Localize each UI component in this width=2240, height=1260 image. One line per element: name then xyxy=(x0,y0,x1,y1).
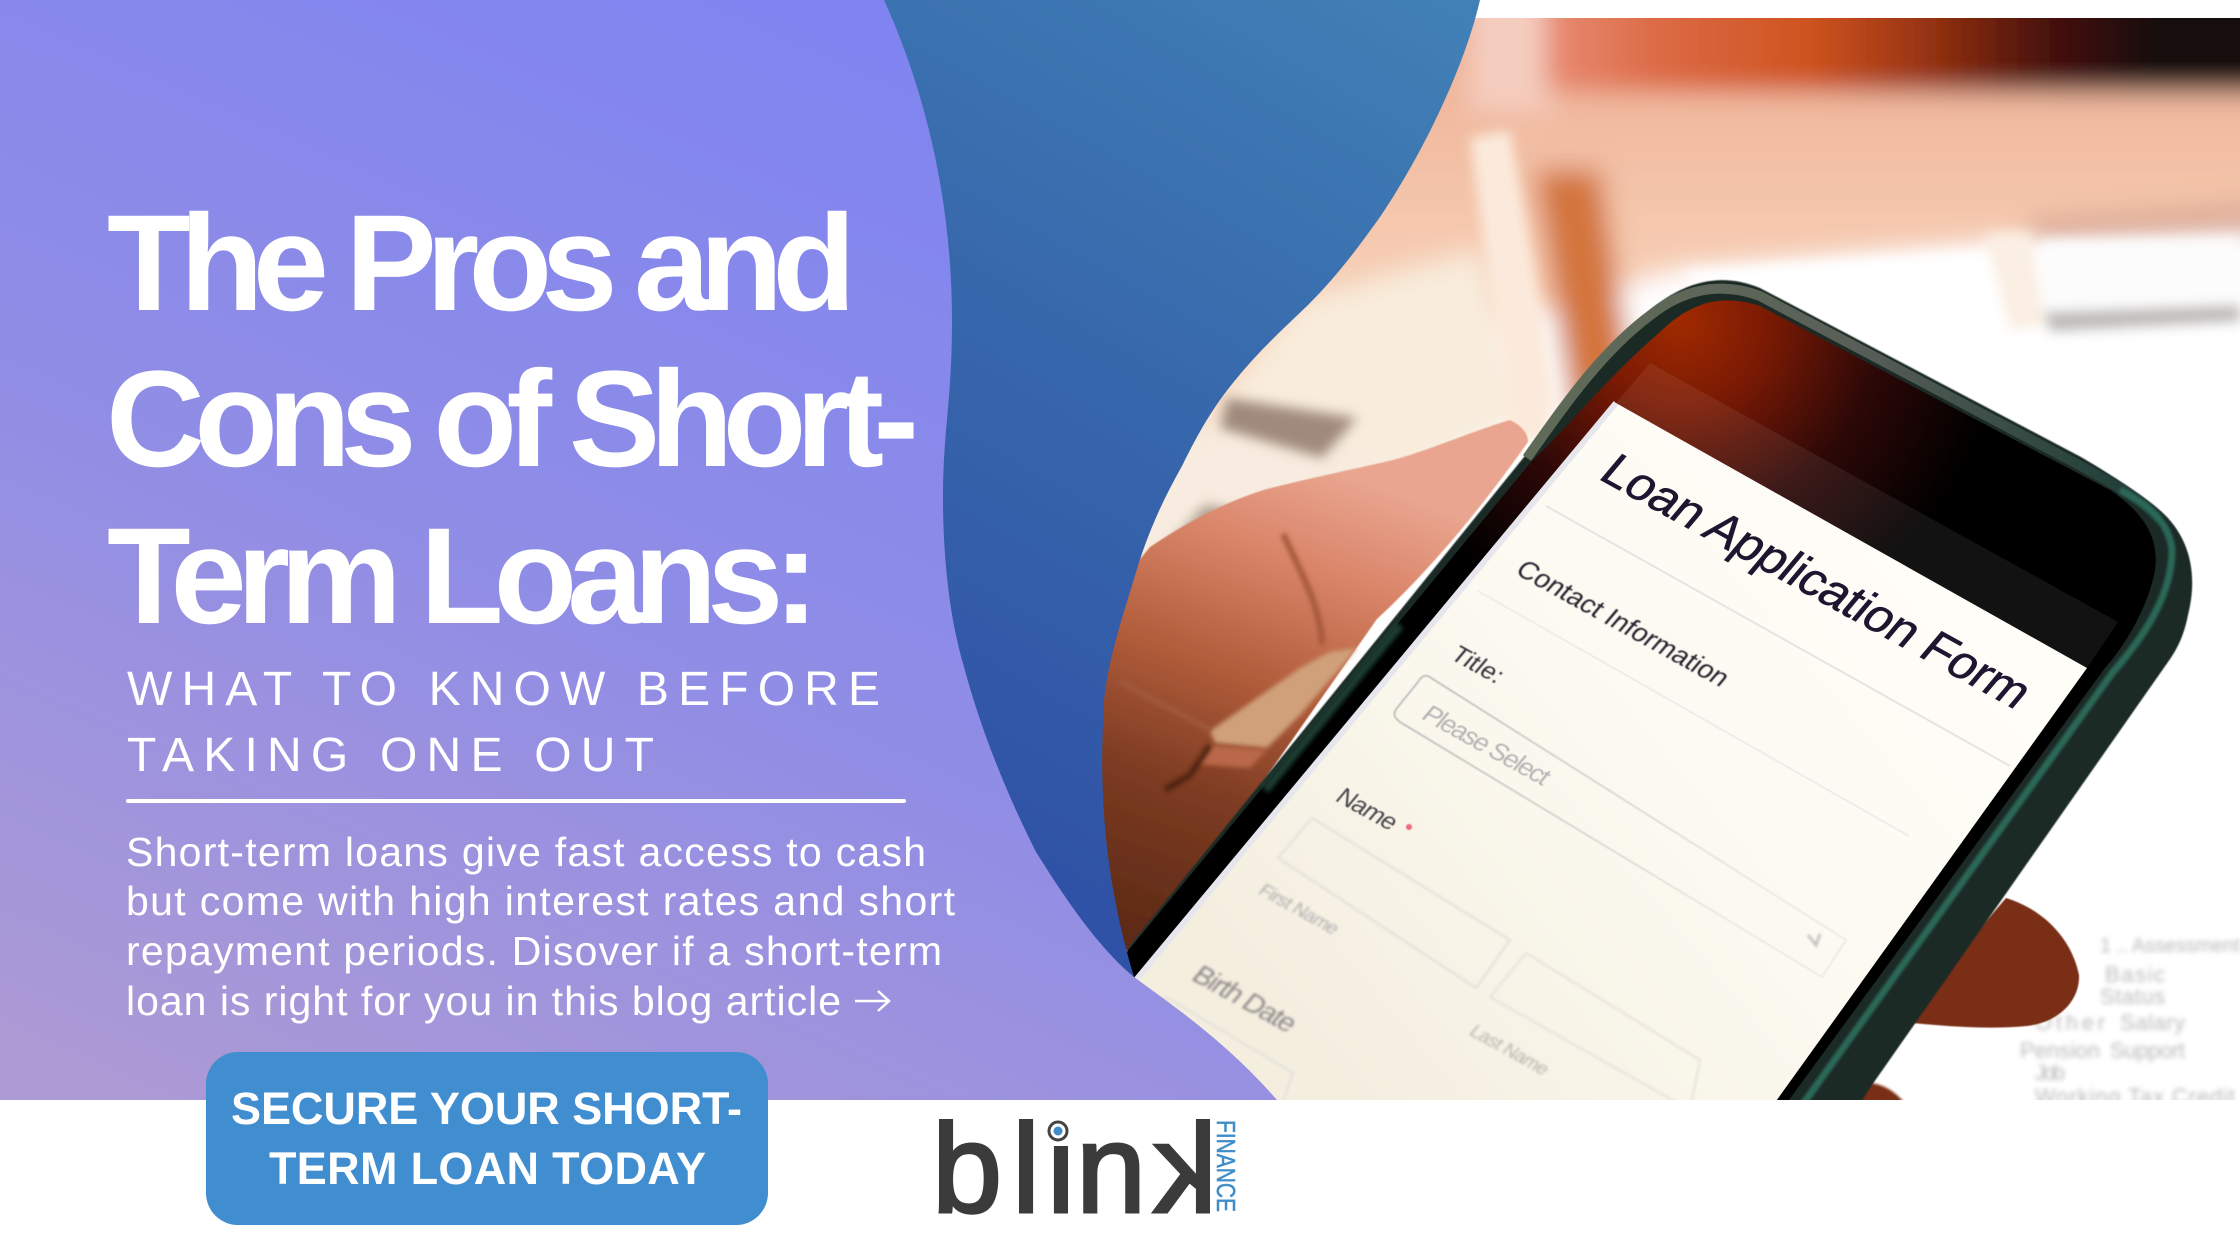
photo: hand holding phone with loan application form xyxy=(1102,18,2240,1100)
blurred paper document lines: Working Tax Credit xyxy=(2035,1084,2235,1109)
name label: Name xyxy=(1330,783,1404,836)
title xyxy=(106,187,919,653)
screen divider lines xyxy=(1478,506,2010,836)
hand: lower finger top xyxy=(1196,745,1267,768)
logo wordmark letters: b xyxy=(932,1098,1002,1239)
icon: arrow xyxy=(855,991,889,1011)
logo wordmark letters: n xyxy=(1076,1098,1146,1239)
phone black bezel xyxy=(1120,300,2156,1104)
intro paragraph: but come with high interest rates and short xyxy=(126,878,956,924)
button label xyxy=(231,1083,742,1194)
blurred paper document lines: Status xyxy=(2100,984,2165,1009)
subtitle xyxy=(127,663,880,782)
thumb creases xyxy=(1120,534,1322,790)
phone side green highlight xyxy=(1803,490,2172,1104)
phone case xyxy=(1120,280,2192,1104)
last name field box xyxy=(1490,953,1700,1110)
required asterisk xyxy=(1406,824,1412,830)
blurred paper document lines: Basic xyxy=(2105,962,2165,987)
hand: finger behind phone xyxy=(1900,898,2079,1028)
last name caption: Last Name xyxy=(1465,1022,1554,1080)
hand: knuckle at bottom of phone xyxy=(1862,1082,1904,1100)
select dropdown arrow xyxy=(1808,934,1820,945)
intro paragraph xyxy=(126,829,956,1024)
title: Term Loans: xyxy=(107,500,819,653)
blurred paper document lines: Support xyxy=(2110,1038,2185,1063)
phone inner display panel xyxy=(1616,363,2118,668)
title label: Title: xyxy=(1445,641,1510,689)
purple gradient panel xyxy=(0,0,1277,1100)
screen left edge line xyxy=(1136,403,1616,980)
blurred paper document lines: 1 .. Assessment xyxy=(2100,935,2240,957)
blurred pen and object details xyxy=(1170,130,2240,560)
blurred desk background xyxy=(1140,18,2240,560)
logo wordmark letters: l xyxy=(1012,1098,1040,1239)
subtitle: WHAT TO KNOW BEFORE xyxy=(127,663,880,716)
logo eye dot xyxy=(1046,1112,1070,1146)
first name field xyxy=(1140,818,1700,1110)
birth date field box xyxy=(1164,996,1294,1100)
logo finance wordmark: FINANCE xyxy=(1211,1120,1241,1212)
logo wordmark letters: k xyxy=(1153,1098,1217,1239)
blurred paper document lines: Salary xyxy=(2120,1010,2185,1035)
blurred paper document lines: Pension xyxy=(2020,1038,2100,1063)
contact information label: Contact Information xyxy=(1510,555,1736,692)
blurred paper document lines: Other xyxy=(2035,1010,2105,1035)
phone edge top highlight xyxy=(1527,289,2160,520)
title: Cons of Short- xyxy=(106,343,919,496)
heading on screen: Loan Application Form xyxy=(1590,445,2043,718)
first name caption: First Name xyxy=(1254,881,1343,939)
logo wordmark letters xyxy=(932,1098,1217,1239)
button label: SECURE YOUR SHORT- xyxy=(231,1083,742,1134)
blurred paper document lines: Job xyxy=(2035,1060,2065,1085)
intro paragraph: loan is right for you in this blog article xyxy=(126,978,841,1024)
divider line xyxy=(126,799,906,803)
blurred paper document lines xyxy=(2020,935,2240,1109)
phone screen xyxy=(1136,403,2087,1104)
call to action button xyxy=(206,1052,768,1225)
intro paragraph: Short-term loans give fast access to cash xyxy=(126,829,926,875)
title select field xyxy=(1394,676,1846,977)
intro paragraph: repayment periods. Disover if a short-term xyxy=(126,928,942,974)
blue curved blob xyxy=(884,0,1480,977)
birth date label: Birth Date xyxy=(1186,960,1304,1038)
title: The Pros and xyxy=(107,187,856,340)
gap between thumb and finger xyxy=(1210,648,1357,748)
button label: TERM LOAN TODAY xyxy=(269,1143,706,1194)
logo wordmark letters: i xyxy=(1047,1098,1075,1239)
logo: blink finance xyxy=(932,1098,1241,1239)
placeholder text: Please Select xyxy=(1416,700,1559,791)
subtitle: TAKING ONE OUT xyxy=(127,729,654,782)
hand: thumb and palm xyxy=(1102,420,1528,952)
phone left side sheen xyxy=(1265,625,1400,790)
